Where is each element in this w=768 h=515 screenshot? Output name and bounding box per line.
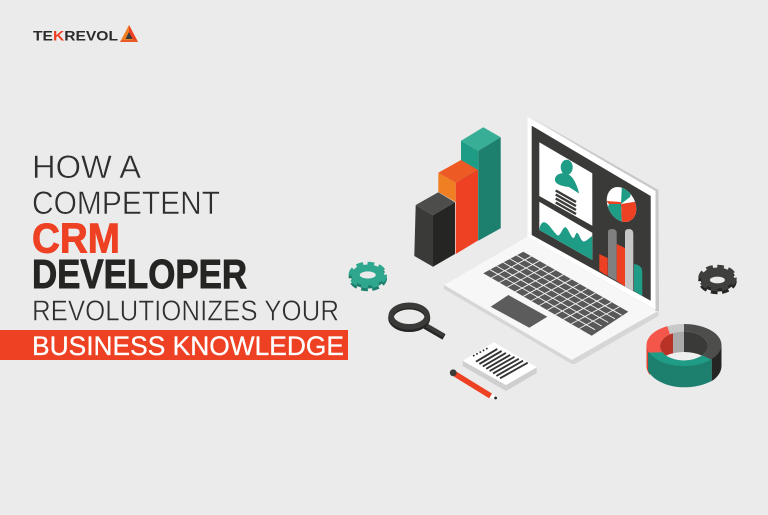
laptop lid xyxy=(528,116,659,311)
pie chart xyxy=(606,187,636,222)
laptop screen xyxy=(532,126,651,301)
keyboard xyxy=(483,252,628,336)
banner text: BUSINESS KNOWLEDGE: BUSINESS KNOWLEDGE xyxy=(32,331,344,361)
notepad dots xyxy=(473,348,489,356)
donut outer side xyxy=(646,345,722,387)
heading line: CRM: CRM xyxy=(32,214,120,262)
logo triangle mark xyxy=(120,25,138,42)
icon: teal gear xyxy=(351,264,384,288)
heading line: HOW A: HOW A xyxy=(32,149,142,185)
notepad text lines xyxy=(476,349,528,378)
heading line: REVOLUTIONIZES YOUR: REVOLUTIONIZES YOUR xyxy=(32,296,339,328)
laptop xyxy=(444,116,659,364)
infographic canvas xyxy=(0,25,737,400)
red banner xyxy=(0,330,348,361)
icon: magnifying glass xyxy=(391,305,444,337)
icon: notepad xyxy=(463,342,537,391)
logo wordmark: TEKREVOL xyxy=(33,28,118,44)
screen bar chart xyxy=(599,229,642,296)
laptop base xyxy=(444,237,658,364)
icon: pencil xyxy=(450,369,497,399)
profile card xyxy=(539,142,592,226)
logo: TekRevol xyxy=(33,25,138,44)
donut chart xyxy=(646,324,722,388)
donut top face segments xyxy=(646,324,722,366)
orange bar xyxy=(438,160,478,254)
donut inner wall xyxy=(660,332,708,360)
profile avatar xyxy=(555,160,579,194)
trackpad xyxy=(491,295,547,328)
headline block xyxy=(0,149,348,361)
teal bar xyxy=(461,127,501,241)
icon: dark gear xyxy=(701,268,734,292)
heading line: DEVELOPER: DEVELOPER xyxy=(32,251,247,297)
wave chart card xyxy=(539,202,592,260)
dark bar xyxy=(414,192,455,267)
profile text lines xyxy=(556,190,576,214)
heading line: COMPETENT: COMPETENT xyxy=(32,185,220,221)
isometric bar chart xyxy=(414,127,501,267)
